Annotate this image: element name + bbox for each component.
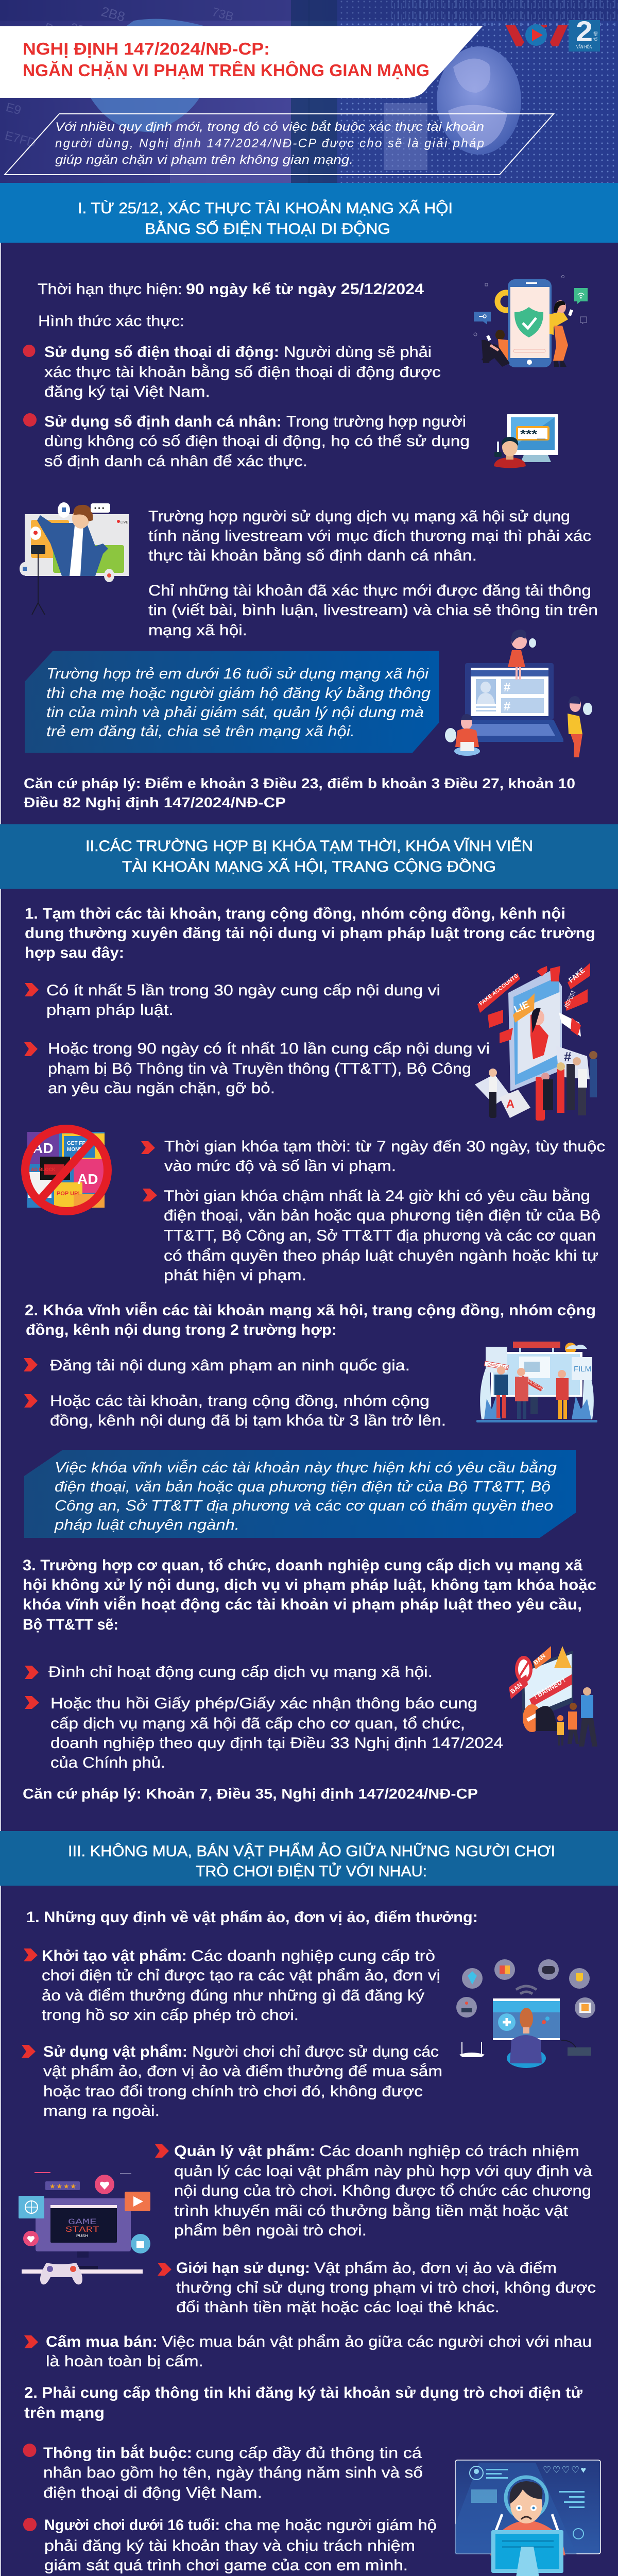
title: NGĂN CHẶN VI PHẠM TRÊN KHÔNG GIAN MẠNG (23, 60, 430, 80)
illustration: game start monitor: ★★★★ (49, 2182, 76, 2190)
subheading: account information: 2. Phải cung cấp thông tin khi đăng ký tài khoản sử dụng trò chơi điện tử (24, 2384, 583, 2401)
subheading: virtual items rules: 1. Những quy định về vật phẩm ảo, đơn vị ảo, điểm thưởng: (26, 1909, 478, 1926)
logo: VOV2 (505, 15, 600, 52)
section III heading (0, 1831, 618, 1886)
icon: red dot (23, 2444, 36, 2457)
illustration: ad block sign: GET FREE (67, 1141, 93, 1146)
bullet: 24 hour deadline: điện thoại, văn bản hoặc qua phương tiện điện tử của Bộ (164, 1207, 600, 1224)
illustration: ad block sign: AD (32, 1140, 53, 1156)
illustration: banned account board: BAN (532, 1652, 547, 1666)
text: verified accounts rule (148, 582, 598, 639)
bullet: 10 times in 90 days: phạm bị Bộ Thông tin và Truyền thông (TT&TT), Bộ Công (48, 1060, 471, 1077)
intro box (5, 114, 554, 175)
bullet: under 16 players: phải đăng ký tài khoản thay và chịu trách nhiệm (44, 2537, 415, 2554)
callout: children under 16: trẻ em đăng tải, chia sẻ trên mạng xã hội. (46, 723, 355, 740)
illustration: game start monitor: PUSH (76, 2234, 88, 2238)
bullet: 24 hour deadline: có thẩm quyền theo pháp luật chuyên ngành hoặc khi tự (164, 1247, 598, 1264)
illustration: game start monitor: GAME (68, 2217, 97, 2227)
bullet: under 16 players: Người chơi dưới 16 tuổi: (44, 2517, 220, 2534)
icon: red dot (23, 2518, 37, 2531)
bullet: personal ID (23, 413, 470, 470)
illustration: banned account board: ! BANNED ! (533, 1676, 566, 1701)
bullet: item use: Sử dụng vật phẩm: (43, 2043, 187, 2060)
bullet: mobile number: Người dùng sẽ phải (284, 344, 432, 361)
title: NGHỊ ĐỊNH 147/2024/NĐ-CP: (23, 39, 270, 58)
illustration: tired gamer at monitor: ♡♡♡♡♥ (543, 2465, 586, 2475)
logo: VOV2: 2 (576, 15, 593, 47)
bullet: item creation: trong hồ sơ xin cấp phép trò chơi. (42, 2007, 299, 2024)
subheading: service providers: hội không xử lý nội dung, dịch vụ vi phạm pháp luật, không tạm khóa hoặc (23, 1577, 596, 1594)
subheading: account information (24, 2384, 583, 2421)
title (23, 39, 430, 80)
subheading: temporary lock: hợp sau đây: (25, 944, 124, 961)
bullet: item management (155, 2143, 593, 2239)
text: livestream rule: thực tài khoản bằng số định danh cá nhân. (148, 547, 477, 564)
bullet: required information: nhân bao gồm họ tên, ngày tháng năm sinh và số (43, 2464, 423, 2481)
bullet: national security: Đăng tải nội dung xâm phạm an ninh quốc gia. (50, 1357, 410, 1374)
bullet: item creation (24, 1947, 440, 2024)
bullet: personal ID: Trong trường hợp người (286, 413, 466, 430)
bullet: revoke license: doanh nghiệp theo quy định tại Điều 33 Nghị định 147/2024 (50, 1735, 503, 1752)
bullet: item management: quản lý các loại vật phẩm này phù hợp với quy định và (174, 2163, 593, 2180)
subheading: temporary lock: dung thường xuyên đăng tải nội dung vi phạm pháp luật trong các trường (25, 925, 595, 942)
icon: chevron (158, 2263, 171, 2276)
icon: chevron (24, 1358, 38, 1371)
illustration: cancelled content board: CANCELLED (487, 1363, 509, 1370)
logo: VOV2: XÃ HỘI (594, 31, 598, 41)
illustration: fake news phone and crowd: REPOST (563, 989, 577, 1009)
illustration: ad block sign: POP UP! (57, 1191, 80, 1197)
subheading: account information: trên mạng (24, 2404, 105, 2421)
subheading: service providers (23, 1557, 596, 1633)
bullet: usage limits: Giới hạn sử dụng: (176, 2260, 310, 2277)
intro box: Với nhiều quy định mới, trong đó có việc bắt buộc xác thực tài khoản (55, 120, 484, 134)
bullet: item creation: Khởi tạo vật phẩm: (42, 1947, 187, 1964)
text: verified accounts rule: tin (viết bài, bình luận, livestream) và chia sẻ thông tin trên (148, 602, 598, 619)
hero background image: 2B8 (99, 4, 127, 25)
illustration: phone with security shield (474, 275, 588, 367)
bullet: item management: trình khuyến mãi có thưởng bằng tiền mặt hoặc vật (174, 2202, 568, 2219)
hero background image: 25BE (68, 21, 101, 42)
bullet: locked 3 times: đồng, kênh nội dung đã bị tạm khóa từ 3 lần trở lên. (50, 1412, 446, 1429)
bullet: item management: phẩm bên ngoài trò chơi. (174, 2222, 367, 2239)
bullet: suspend services: Đình chỉ hoạt động cung cấp dịch vụ mạng xã hội. (48, 1664, 433, 1681)
subheading: service providers: 3. Trường hợp cơ quan, tổ chức, doanh nghiệp cung cấp dịch vụ mạng xã (23, 1557, 583, 1574)
text: implementation period (38, 281, 424, 298)
intro box: giúp ngăn chặn vi phạm trên không gian mạng. (55, 153, 353, 167)
hero background image: E7FD (3, 129, 38, 150)
bullet: under 16 players: giám sát quá trình chơi game của con em mình. (44, 2557, 408, 2574)
bullet: revoke license: của Chính phủ. (50, 1754, 165, 1771)
subheading: permanent lock: đồng, kênh nội dung trong 2 trường hợp: (26, 1321, 337, 1338)
text: legal basis II: Căn cứ pháp lý: Khoản 7, Điều 35, Nghị định 147/2024/NĐ-CP (23, 1786, 478, 1802)
bullet: usage limits (158, 2260, 596, 2316)
subheading: permanent lock (25, 1301, 596, 1338)
hero background image: D1 (43, 21, 62, 38)
bullet: locked 3 times (24, 1393, 446, 1429)
illustration: fake news phone and crowd: FAKE ACCOUNTS (478, 973, 519, 1007)
bullet: item use: hoặc trao đổi trong chính trò chơi đó, không được (43, 2083, 423, 2100)
bullet: personal ID: dùng không có số điện thoại di động, họ có thể sử dụng (44, 433, 470, 450)
bullet: 24 hour deadline: TT&TT, Bộ Công an, Sở TT&TT địa phương và các cơ quan (164, 1227, 596, 1244)
subheading: service providers: Bộ TT&TT sẽ: (23, 1616, 118, 1633)
bullet: 24 hour deadline: Thời gian khóa chậm nhất là 24 giờ khi có yêu cầu bằng (164, 1188, 590, 1205)
illustration: game start monitor: START (65, 2225, 99, 2234)
bullet: revoke license (25, 1695, 503, 1771)
bullet: trading ban: Cấm mua bán: (46, 2333, 158, 2350)
illustration: livestreamer (20, 502, 129, 615)
bullet: under 16 players (23, 2517, 437, 2574)
hero background image (0, 0, 618, 183)
section II heading: TÀI KHOẢN MẠNG XÃ HỘI, TRANG CỘNG ĐỒNG (122, 858, 496, 875)
text: implementation period: Thời hạn thực hiện: (38, 281, 182, 298)
illustration: fake news phone and crowd: LIE (512, 999, 531, 1015)
callout: children under 16: tin của mình và phải giám sát, quản lý nội dung mà (46, 704, 424, 721)
illustration: cancelled content board (476, 1342, 597, 1422)
text: livestream rule: Trường hợp người sử dụng dịch vụ mạng xã hội sử dụng (148, 508, 570, 525)
icon: chevron (155, 2144, 169, 2158)
bullet: revoke license: cấp dịch vụ mạng xã hội đã cấp cho cơ quan, tổ chức, (50, 1715, 465, 1732)
illustration: banned account board (509, 1646, 597, 1747)
subheading: service providers: khóa vĩnh viễn hoạt động các tài khoản vi phạm pháp luật theo yêu cầu, (23, 1596, 582, 1613)
illustration: livestreamer: LIVE (121, 521, 129, 524)
illustration: kids using social network on a laptop (445, 630, 592, 757)
hero background image: 73B (210, 5, 235, 24)
bullet: usage limits: đổi thành tiền mặt hoặc các loại thẻ khác. (176, 2299, 500, 2316)
bullet: mobile number: xác thực tài khoản bằng số điện thoại di động được (44, 364, 441, 381)
text: verified accounts rule: mạng xã hội. (148, 622, 247, 639)
hero header (0, 0, 618, 183)
bullet: 5 times in 30 days (25, 982, 440, 1019)
bullet: mobile number: đăng ký tại Việt Nam. (44, 383, 210, 400)
intro box: người dùng, Nghị định 147/2024/NĐ-CP được cho sẽ là giải pháp (55, 137, 484, 150)
bullet: item use (22, 2043, 442, 2120)
icon: chevron (24, 1042, 38, 1056)
callout: children under 16: Trường hợp trẻ em dưới 16 tuổi sử dụng mạng xã hội (46, 666, 429, 682)
subheading: permanent lock: 2. Khóa vĩnh viễn các tài khoản mạng xã hội, trang cộng đồng, nhóm cộng (25, 1301, 596, 1319)
illustration: cancelled content board: FILM (574, 1365, 591, 1374)
illustration: fake news phone and crowd (475, 963, 597, 1121)
logo: VOV2: VĂN HÓA (576, 44, 592, 49)
icon: chevron (25, 983, 39, 996)
subheading: temporary lock (25, 905, 595, 961)
icon: chevron (25, 1666, 39, 1679)
bullet: item creation: ảo và điểm thưởng đúng như những gì đã đăng ký (42, 1987, 424, 2004)
illustration: game start monitor (19, 2172, 150, 2284)
text: implementation period: 90 ngày kể từ ngày 25/12/2024 (186, 281, 424, 298)
illustration: fake news phone and crowd: # (564, 1049, 572, 1064)
icon: chevron (141, 1141, 155, 1154)
section I heading: I. TỪ 25/12, XÁC THỰC TÀI KHOẢN MẠNG XÃ HỘI (78, 199, 453, 217)
bullet: locked 3 times: Hoặc các tài khoản, trang cộng đồng, nhóm cộng (50, 1393, 430, 1410)
bullet: mobile number (23, 344, 441, 400)
section III heading: TRÒ CHƠI ĐIỆN TỬ VỚI NHAU: (196, 1862, 427, 1880)
illustration: online gamer with icons (456, 1959, 595, 2068)
icon: chevron (24, 1948, 38, 1961)
illustration: fake news phone and crowd: FAKE (567, 966, 587, 984)
text: legal basis I (24, 775, 575, 810)
text: livestream rule: tính năng livestream với mục đích thương mại thì phải xác (148, 528, 591, 545)
section I heading (0, 183, 618, 243)
illustration: kids using social network on a laptop: # (504, 681, 510, 694)
bullet: revoke license: Hoặc thu hồi Giấy phép/Giấy xác nhận thông báo cung (50, 1695, 477, 1712)
bullet: required information: Thông tin bắt buộc: (43, 2444, 192, 2462)
section I heading: BẰNG SỐ ĐIỆN THOẠI DI ĐỘNG (145, 220, 390, 238)
bullet: 5 times in 30 days: Có ít nhất 5 lần trong 30 ngày cung cấp nội dung vi (46, 982, 440, 999)
title banner (0, 26, 483, 98)
illustration: cancelled content board: CANCELLED (524, 1378, 544, 1392)
icon: chevron (143, 1189, 157, 1201)
icon: chevron (24, 1394, 38, 1408)
callout: permanent lock procedure: điện thoại, văn bản hoặc qua phương tiện điện tử của Bộ TT&TT, Bộ (55, 1479, 551, 1495)
bullet: temporary lock duration: Thời gian khóa tạm thời: từ 7 ngày đến 30 ngày, tùy thuộc (164, 1138, 605, 1155)
hero background image: E9 (4, 100, 23, 117)
bullet: required information (23, 2444, 423, 2501)
icon: chevron (25, 1696, 39, 1709)
bullet: 10 times in 90 days (24, 1040, 490, 1097)
illustration: ad block sign: MONEY (67, 1147, 86, 1153)
bullet: 10 times in 90 days: Hoặc trong 90 ngày có ít nhất 10 lần cung cấp nội dung vi (48, 1040, 490, 1057)
bullet: required information: cung cấp đầy đủ thông tin cá (196, 2445, 422, 2462)
icon: red dot (23, 413, 37, 427)
bullet: item creation: Các doanh nghiệp cung cấp trò (191, 1947, 435, 1964)
callout: permanent lock procedure (24, 1450, 576, 1538)
bullet: personal ID: Sử dụng số định danh cá nhân: (44, 413, 282, 430)
bullet: item management: nội dung của trò chơi. Không được tổ chức các chương (174, 2182, 591, 2199)
illustration: monitor with password and user: ***_ (520, 428, 546, 440)
bullet: temporary lock duration: vào mức độ và số lần vi phạm. (164, 1158, 396, 1175)
section II heading (0, 824, 618, 889)
bullet: under 16 players: cha mẹ hoặc người giám hộ (225, 2517, 437, 2534)
section II heading: II.CÁC TRƯỜNG HỢP BỊ KHÓA TẠM THỜI, KHÓA VĨNH VIỄN (85, 837, 533, 855)
bullet: item use: mang ra ngoài. (43, 2103, 160, 2120)
bullet: trading ban (24, 2333, 592, 2370)
text: livestream rule (148, 508, 591, 564)
illustration: ad block sign: AD (77, 1171, 98, 1187)
icon: chevron (24, 2335, 38, 2348)
bullet: 24 hour deadline: phát hiện vi phạm. (164, 1267, 306, 1284)
illustration: ad block sign (25, 1129, 108, 1211)
bullet: item creation: chơi điện tử chỉ được tạo ra các vật phẩm ảo, đơn vị (42, 1967, 440, 1984)
bullet: item use: vật phẩm ảo, đơn vị ảo và điểm thưởng để mua sắm (43, 2063, 442, 2080)
bullet: trading ban: Việc mua bán vật phẩm ảo giữa các người chơi với nhau (162, 2333, 592, 2350)
bullet: personal ID: số định danh cá nhân để xác thực. (44, 453, 307, 470)
bullet: item management: Quản lý vật phẩm: (174, 2143, 315, 2160)
callout: children under 16: thì cha mẹ hoặc người giám hộ đăng ký bằng thông (46, 685, 431, 702)
bullet: temporary lock duration (141, 1138, 605, 1175)
illustration: monitor with password and user (494, 414, 558, 468)
callout: permanent lock procedure: pháp luật chuyên ngành. (54, 1517, 239, 1533)
bullet: trading ban: là hoàn toàn bị cấm. (46, 2353, 203, 2370)
bullet: required information: điện thoại di động Việt Nam. (43, 2484, 262, 2501)
bullet: 24 hour deadline (143, 1188, 600, 1284)
bullet: item use: Người chơi chỉ được sử dụng các (192, 2043, 439, 2060)
illustration: ad block sign: AD BLOCK (31, 1167, 56, 1172)
illustration: tired gamer at monitor (455, 2460, 600, 2576)
section III heading: III. KHÔNG MUA, BÁN VẬT PHẨM ẢO GIỮA NHỮNG NGƯỜI CHƠI (68, 1842, 555, 1860)
callout: children under 16 (25, 651, 439, 753)
bullet: item management: Các doanh nghiệp có trách nhiệm (319, 2143, 579, 2160)
text: legal basis I: Điều 82 Nghị định 147/2024/NĐ-CP (24, 794, 286, 810)
illustration: banned account board: BAN (509, 1681, 524, 1695)
callout: permanent lock procedure: Việc khóa vĩnh viễn các tài khoản này thực hiện khi có yêu cầu bằng (55, 1460, 557, 1476)
icon: chevron (22, 2045, 36, 2058)
illustration: kids using social network on a laptop: # (504, 700, 510, 714)
bullet: mobile number: Sử dụng số điện thoại di động: (44, 344, 279, 361)
bullet: usage limits: thưởng chỉ sử dụng trong phạm vi trò chơi, không được (176, 2279, 596, 2296)
text: forms of verification: Hình thức xác thực: (38, 313, 184, 330)
bullet: 5 times in 30 days: phạm pháp luật. (46, 1002, 174, 1019)
text: legal basis I: Căn cứ pháp lý: Điểm e khoản 3 Điều 23, điểm b khoản 3 Điều 27, khoản 10 (24, 775, 575, 791)
icon: red dot (23, 345, 35, 357)
illustration: livestreamer: • • • (94, 504, 104, 512)
bullet: usage limits: Vật phẩm ảo, đơn vị ảo và điểm (314, 2260, 557, 2277)
bullet: 10 times in 90 days: an yêu cầu ngăn chặn, gỡ bỏ. (48, 1080, 275, 1097)
callout: permanent lock procedure: Công an, Sở TT&TT địa phương và các cơ quan có thẩm quyền theo (55, 1498, 553, 1514)
subheading: temporary lock: 1. Tạm thời các tài khoản, trang cộng đồng, nhóm cộng đồng, kênh nội (25, 905, 565, 922)
text: verified accounts rule: Chỉ những tài khoản đã xác thực mới được đăng tải thông (148, 582, 591, 599)
illustration: fake news phone and crowd: A (506, 1097, 514, 1110)
